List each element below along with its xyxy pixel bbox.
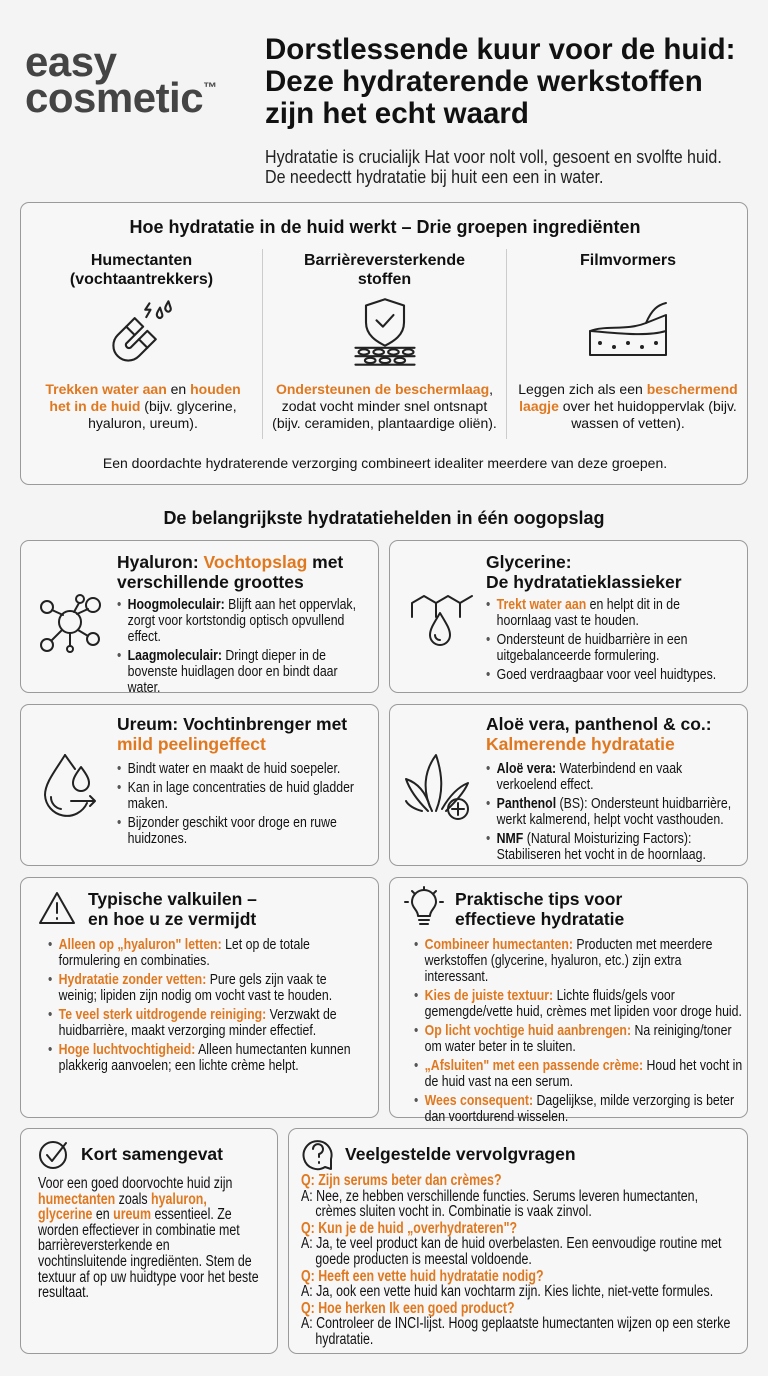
card: valkuilen xyxy=(20,877,379,1118)
title: Dorstlessende kuur voor de huid: Deze hydraterende werkstoffen zijn het echt waard xyxy=(265,33,735,130)
card: valkuilen: Hydratatie zonder vetten: Pure gels zijn vaak te weinig; lipiden zijn nodig om vocht vast te houden. xyxy=(59,971,332,1004)
column: humectanten xyxy=(45,252,241,431)
card: summary: Voor een goed doorvochte huid zijn humectanten zoals hyaluron, glycerine en ureum essentieel. Ze worden effectiever in combinatie met barrièreversterkende en vochtinsluitende ingrediënten. Stem de textuur af op uw huidtype voor het beste resultaat. xyxy=(38,1175,259,1301)
card: hyaluron: Laagmoleculair: Dringt dieper in de bovenste huidlagen door en bindt daar water. xyxy=(128,647,338,696)
card: aloe vera: Aloë vera: Waterbindend en vaak verkoelend effect. xyxy=(497,760,682,793)
panel: how hydration works xyxy=(20,202,748,485)
icon: lightbulb xyxy=(404,886,444,925)
card: glycerine: Goed verdraagbaar voor veel huidtypes. xyxy=(497,666,716,683)
icon: film layer xyxy=(589,302,667,356)
card: hyaluron xyxy=(20,540,379,693)
card: aloe vera xyxy=(389,704,748,866)
card: hyaluron: verschillende groottes xyxy=(117,572,304,592)
card: glycerine: Ondersteunt de huidbarrière in een uitgebalanceerde formulering. xyxy=(497,631,687,664)
card: ureum: mild peelingeffect xyxy=(117,734,266,754)
card: FAQ: Q: Heeft een vette huid hydratatie nodig? xyxy=(301,1268,544,1285)
card: FAQ: A: Controleer de INCI-lijst. Hoog geplaatste humectanten wijzen op een sterke hydratatie. xyxy=(301,1315,730,1348)
card: tips: Kies de juiste textuur: Lichte fluids/gels voor gemengde/vette huid, crèmes met lipiden voor droge huid. xyxy=(425,987,742,1020)
section heading: De belangrijkste hydratatiehelden in één oogopslag xyxy=(163,508,605,528)
card: summary xyxy=(20,1128,278,1354)
subtitle: De needectt hydratatie bij huit een een in water. xyxy=(265,167,603,187)
card: FAQ: Veelgestelde vervolgvragen xyxy=(345,1144,576,1164)
icon: molecule xyxy=(40,594,101,653)
icon: question bubble xyxy=(302,1140,333,1170)
card: ureum: Ureum: Vochtinbrenger met xyxy=(117,714,347,734)
card: tips: Wees consequent: Dagelijkse, milde verzorging is beter dan voortdurend wisselen. xyxy=(425,1092,734,1125)
column: filmvormers xyxy=(518,252,738,431)
card: FAQ: Q: Hoe herken Ik een goed product? xyxy=(301,1300,515,1317)
column: humectanten: Trekken water aan en houden het in de huid (bijv. glycerine, hyaluron, ureum). xyxy=(45,381,241,431)
logo: cosmetic™ xyxy=(25,74,217,121)
card: ureum: Kan in lage concentraties de huid gladder maken. xyxy=(128,779,354,812)
column: barrier: Ondersteunen de beschermlaag, zodat vocht minder snel ontsnapt (bijv. ceramiden, plantaardige oliën). xyxy=(272,381,497,431)
footer note: Een doordachte hydraterende verzorging combineert idealiter meerdere van deze groepen. xyxy=(103,455,667,471)
column: filmvormers: Leggen zich als een beschermend laagje over het huidoppervlak (bijv. wassen of vetten). xyxy=(518,381,738,431)
icon: hexagon drop xyxy=(411,595,473,646)
logo: easy xyxy=(25,38,116,85)
icon: check circle xyxy=(39,1141,67,1169)
card: tips: effectieve hydratatie xyxy=(455,909,624,929)
card: glycerine xyxy=(389,540,748,693)
card: valkuilen: Typische valkuilen – xyxy=(88,889,257,909)
card: aloe vera: NMF (Natural Moisturizing Factors): Stabiliseren het vocht in de hoornlaag. xyxy=(497,830,706,863)
column: filmvormers: Filmvormers xyxy=(580,252,676,269)
column: humectanten: (vochtaantrekkers) xyxy=(70,271,213,288)
card: tips xyxy=(389,877,748,1118)
card: valkuilen: Te veel sterk uitdrogende reiniging: Verzwakt de huidbarrière, maakt verzorging minder effectief. xyxy=(59,1006,337,1039)
card: ureum: Bindt water en maakt de huid soepeler. xyxy=(128,760,340,777)
icon: drops with arrow xyxy=(44,754,96,817)
card: valkuilen: Hoge luchtvochtigheid: Alleen humectanten kunnen plakkerig aanvoelen; een lichte crème helpt. xyxy=(59,1041,351,1074)
column: barrier: Barrièreversterkende xyxy=(304,252,465,269)
subtitle: Hydratatie is crucialijk Hat voor nolt voll, gesoent en svolfte huid. xyxy=(265,147,722,167)
card: FAQ: A: Ja, ook een vette huid kan vochtarm zijn. Kies lichte, niet-vette formules. xyxy=(301,1283,713,1300)
card: FAQ: A: Ja, te veel product kan de huid overbelasten. Een eenvoudige routine met goede producten is meestal voldoende. xyxy=(301,1235,722,1268)
card: glycerine: Glycerine: xyxy=(486,552,572,572)
column: barrier: stoffen xyxy=(358,271,411,288)
card: aloe vera: Kalmerende hydratatie xyxy=(486,734,675,754)
card: aloe vera: Panthenol (BS): Ondersteunt huidbarrière, werkt kalmerend, helpt vocht vasthouden. xyxy=(497,795,731,828)
icon: aloe plant with plus xyxy=(405,754,469,820)
icon: shield over skin xyxy=(354,298,416,366)
card: ureum xyxy=(20,704,379,866)
card: hyaluron: Hoogmoleculair: Blijft aan het oppervlak, zorgt voor kortstondig optisch opvullend effect. xyxy=(128,596,356,645)
column: barrier xyxy=(272,252,497,431)
card: tips: Combineer humectanten: Producten met meerdere werkstoffen (glycerine, hyaluron, etc.) zijn extra interessant. xyxy=(425,936,712,985)
card: glycerine: Trekt water aan en helpt dit in de hoornlaag vast te houden. xyxy=(497,596,680,629)
card: hyaluron: Hyaluron: Vochtopslag met xyxy=(117,552,343,572)
subtitle xyxy=(265,147,722,187)
card: valkuilen: en hoe u ze vermijdt xyxy=(88,909,256,929)
card: summary: Kort samengevat xyxy=(81,1144,223,1164)
card: ureum: Bijzonder geschikt voor droge en ruwe huidzones. xyxy=(128,814,337,847)
card: aloe vera: Aloë vera, panthenol & co.: xyxy=(486,714,712,734)
card: FAQ: A: Nee, ze hebben verschillende functies. Serums leveren humectanten, crèmes sluiten vocht in. Combinatie is vaak zinvol. xyxy=(301,1188,698,1220)
card: tips: Praktische tips voor xyxy=(455,889,622,909)
column: humectanten: Humectanten xyxy=(91,252,192,269)
card: tips: Op licht vochtige huid aanbrengen: Na reiniging/toner om water beter in te sluiten. xyxy=(425,1022,732,1055)
card: FAQ xyxy=(288,1128,748,1354)
logo xyxy=(25,38,217,121)
card: valkuilen: Alleen op „hyaluron" letten: Let op de totale formulering en combinaties. xyxy=(59,936,310,969)
icon: warning xyxy=(39,892,75,924)
panel heading: Hoe hydratatie in de huid werkt – Drie groepen ingrediënten xyxy=(129,217,641,237)
card: FAQ: Q: Zijn serums beter dan crèmes? xyxy=(301,1172,502,1189)
card: FAQ: Q: Kun je de huid „overhydrateren"? xyxy=(301,1220,517,1237)
card: tips: „Afsluiten" met een passende crème: Houd het vocht in de huid vast na een serum. xyxy=(425,1057,742,1090)
card: glycerine: De hydratatieklassieker xyxy=(486,572,682,592)
icon: magnet with drops xyxy=(112,300,172,362)
